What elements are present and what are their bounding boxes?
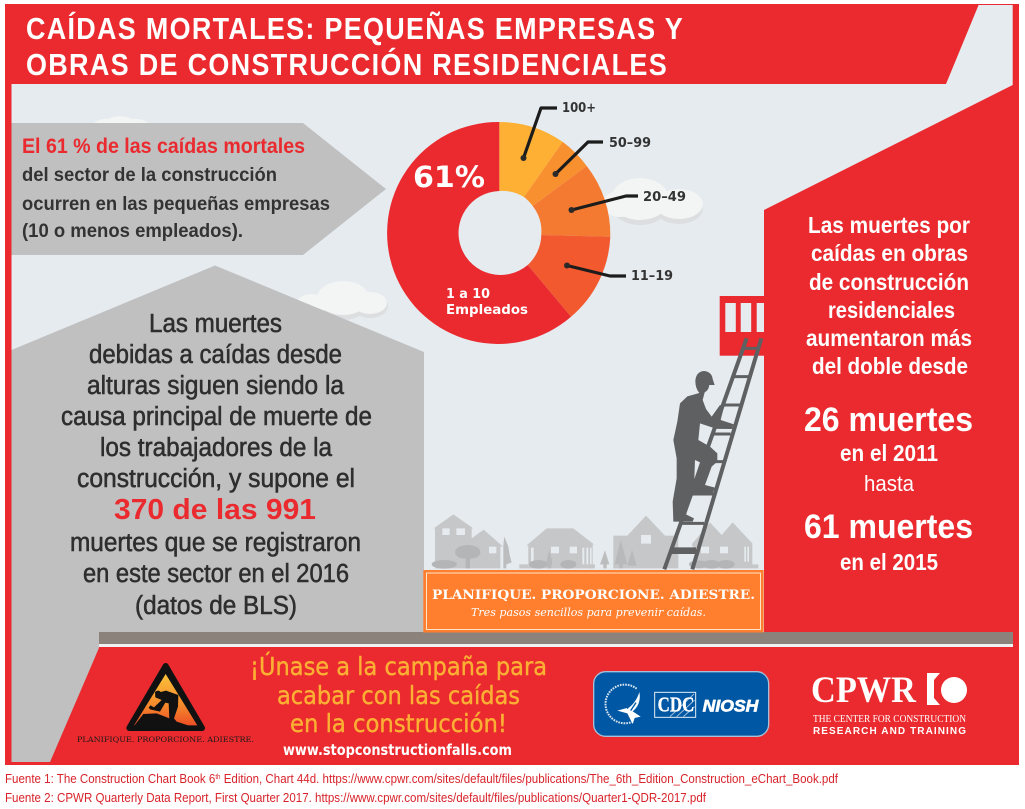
panel: house with fall deaths text: causa principal de muerte de: [61, 403, 372, 431]
donut labels: Empleados: [446, 302, 528, 318]
panel: house with fall deaths text: en este sector en el 2016: [83, 560, 349, 588]
panel: house with fall deaths text: Las muertes: [149, 310, 282, 338]
panel: house with fall deaths text: muertes que se registraron: [70, 529, 361, 557]
cloud: behind house: [296, 281, 388, 320]
donut labels: 61%: [413, 160, 485, 194]
panel: footer campaign: [50, 648, 1019, 765]
sources: Fuente 1: The Construction Chart Book 6: [5, 771, 242, 786]
logo: CDC NIOSH badge: NIOSH: [703, 696, 759, 715]
donut labels: 20–49: [643, 189, 686, 205]
panel: house with fall deaths text: [12, 266, 424, 762]
panel: right red house with statistics: de construcción: [809, 269, 969, 295]
panel: footer campaign: ¡Únase a la campaña para: [250, 651, 547, 681]
panel: arrow callout 61 percent: del sector de la construcción: [22, 164, 277, 186]
bottom taupe bar: [99, 632, 1013, 647]
panel: house with fall deaths text: (datos de BLS): [135, 592, 297, 620]
sources: [5, 771, 838, 805]
title banner: [5, 4, 979, 84]
cloud: right of donut: [602, 178, 703, 225]
cloud: top left: [92, 116, 150, 126]
neighbourhood silhouette left: [432, 514, 595, 569]
icon: warning triangle with worker: [129, 666, 202, 728]
panel: right red house with statistics: 61 muertes: [804, 508, 973, 546]
donut leader lines: [524, 108, 638, 276]
window: [720, 296, 765, 356]
donut labels: 11–19: [631, 268, 673, 284]
leader dots: [520, 155, 574, 268]
title banner: CAÍDAS MORTALES: PEQUEÑAS EMPRESAS Y: [26, 11, 684, 46]
panel: right red house with statistics: hasta: [864, 471, 915, 496]
sources: Fuente 2: CPWR Quarterly Data Report, First Quarter 2017. https://www.cpwr.com/sites/default/files/publications/Quarter1-QDR-2017.pdf: [5, 790, 706, 805]
ladder: [664, 338, 761, 569]
sources: th: [215, 774, 221, 781]
sources: Edition, Chart 44d. https://www.cpwr.com/sites/default/files/publications/The_6th_Edition_Construction_eChart_Book.pdf: [221, 771, 838, 786]
panel: right red house with statistics: residenciales: [828, 297, 955, 323]
logo: CPWR: CPWR: [811, 670, 917, 711]
panel: arrow callout 61 percent: [12, 123, 386, 255]
neighbourhood silhouette right: [600, 516, 758, 569]
panel: footer campaign: www.stopconstructionfalls.com: [283, 741, 512, 759]
panel: right red house with statistics: [764, 85, 1019, 648]
panel: footer campaign: acabar con las caídas: [277, 681, 520, 710]
panel: right red house with statistics: en el 2011: [840, 440, 938, 466]
donut labels: 1 a 10: [446, 287, 490, 302]
donut chart: [387, 100, 686, 344]
panel: right red house with statistics: del doble desde: [812, 353, 968, 379]
worker silhouette: [673, 371, 734, 522]
panel: house with fall deaths text: 370 de las 991: [114, 494, 316, 526]
donut labels: 100+: [562, 100, 596, 116]
panel: arrow callout 61 percent: ocurren en las pequeñas empresas: [22, 193, 330, 215]
panel: orange tagline: Tres pasos sencillos para prevenir caídas.: [471, 606, 706, 619]
panel: house with fall deaths text: construcción, y supone el: [77, 465, 355, 493]
panel: right red house with statistics: Las muertes por: [808, 212, 970, 238]
donut labels: 50–99: [609, 135, 651, 151]
panel: right red house with statistics: aumentaron más: [806, 325, 972, 351]
title banner: OBRAS DE CONSTRUCCIÓN RESIDENCIALES: [26, 46, 668, 82]
logo: CPWR: [811, 670, 967, 737]
panel: house with fall deaths text: debidas a caídas desde: [89, 341, 342, 369]
logo: CPWR: THE CENTER FOR CONSTRUCTION: [813, 714, 966, 725]
donut labels: [413, 100, 686, 318]
logo: CPWR: RESEARCH AND TRAINING: [813, 726, 966, 737]
panel: orange tagline: [423, 570, 764, 632]
panel: house with fall deaths text: los trabajadores de la: [100, 434, 333, 462]
panel: right red house with statistics: caídas en obras: [811, 240, 968, 266]
panel: right red house with statistics: 26 muertes: [804, 401, 973, 439]
panel: right red house with statistics: en el 2015: [840, 549, 938, 575]
panel: arrow callout 61 percent: (10 o menos empleados).: [22, 220, 243, 242]
panel: footer campaign: PLANIFIQUE. PROPORCIONE. ADIESTRE.: [77, 736, 254, 744]
panel: footer campaign: en la construcción!: [290, 709, 507, 738]
panel: house with fall deaths text: alturas siguen siendo la: [87, 372, 345, 400]
panel: orange tagline: PLANIFIQUE. PROPORCIONE. ADIESTRE.: [432, 588, 755, 603]
logo: CDC NIOSH badge: [594, 672, 769, 736]
logo: CDC NIOSH badge: CDC: [658, 692, 694, 716]
panel: arrow callout 61 percent: El 61 % de las caídas mortales: [22, 135, 305, 158]
